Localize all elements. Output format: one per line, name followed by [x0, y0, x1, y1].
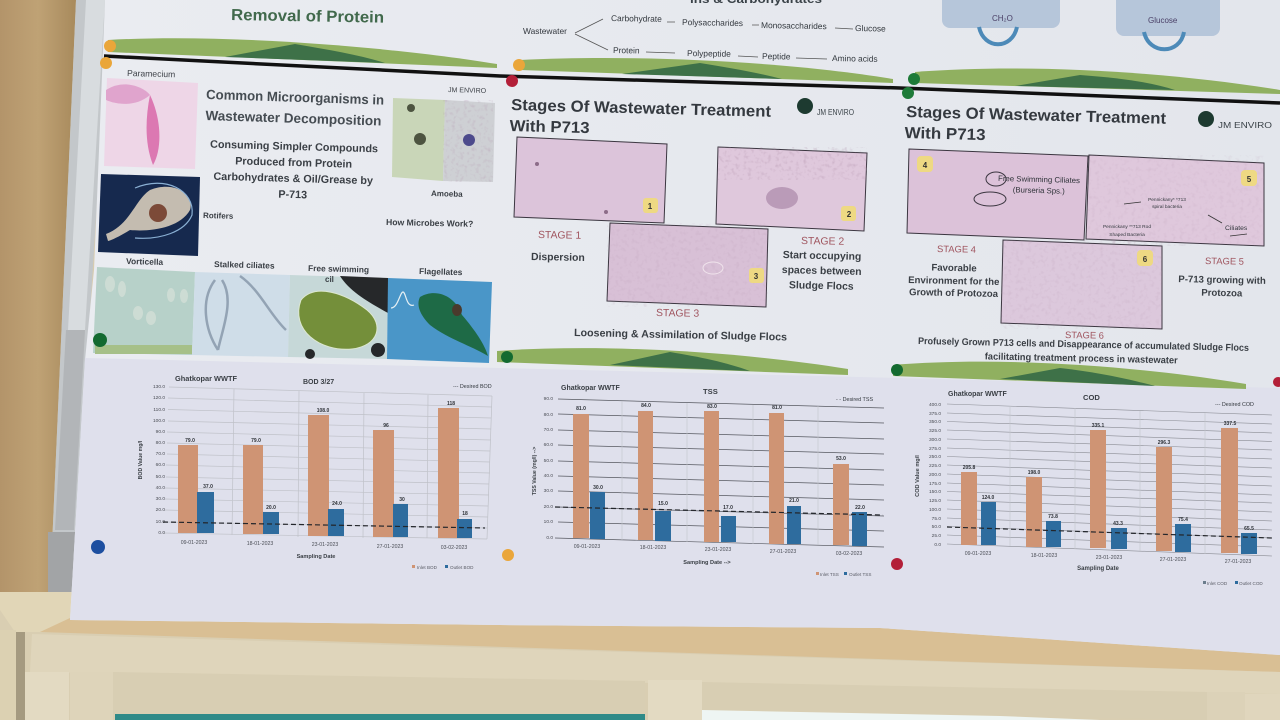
flow diagram: Monosaccharides — [761, 20, 827, 31]
y axis: 0.0 — [934, 542, 941, 548]
flow diagram: Peptide — [762, 51, 791, 62]
y axis: 225.0 — [929, 463, 941, 469]
logo: JM Enviro — [797, 98, 854, 117]
value labels: 81.0 — [576, 406, 586, 412]
box: glucose — [1116, 0, 1220, 49]
text: profusely grown: facilitating treatment process in wastewater — [985, 351, 1178, 366]
subheading: consuming simpler compounds: Consuming Simpler Compounds — [210, 139, 378, 155]
image: stage 5: Shaped Bacteria — [1109, 232, 1145, 238]
y axis: 30.0 — [156, 496, 165, 502]
value labels: 96 — [383, 423, 389, 429]
desired line — [163, 522, 485, 528]
value labels: 118 — [447, 401, 455, 407]
bars — [178, 408, 472, 538]
chart titles: Ghatkopar WWTF — [561, 385, 620, 392]
chart titles: COD — [1083, 393, 1100, 402]
value labels: 205.8 — [963, 465, 975, 471]
value labels: 21.0 — [789, 498, 799, 504]
heading: common microorganisms: Wastewater Decomposition — [205, 108, 382, 129]
value labels — [963, 421, 1254, 532]
poster: common microorganisms — [93, 68, 495, 363]
text: P-713 growing: P-713 growing with — [1178, 274, 1266, 287]
y axis: 0.0 — [546, 535, 553, 541]
x axis labels: 27-01-2023 — [1225, 559, 1251, 565]
image: stage 6 — [1001, 240, 1162, 329]
label: free swimming: Free swimming — [308, 263, 369, 275]
chart titles: --- Desired BOD — [453, 384, 492, 390]
value labels: 124.0 — [982, 495, 994, 501]
chart titles — [175, 374, 492, 390]
heading: stages of wastewater treatment: With P713 — [904, 125, 986, 144]
value labels: 20.0 — [266, 505, 276, 511]
y axis: BOD Value mg/l — [138, 440, 144, 479]
chart titles: --- Desired COD — [1215, 402, 1254, 408]
image: rotifers — [98, 174, 200, 256]
value labels: 108.0 — [317, 408, 329, 414]
y axis: 100.0 — [153, 418, 165, 424]
heading: stages of wastewater treatment: With P713 — [509, 118, 590, 137]
top centre poster fragment — [520, 0, 893, 83]
y axis: TSS Value (mg/l) --> — [532, 447, 538, 495]
y axis: 80.0 — [544, 412, 553, 418]
x axis labels: 18-01-2023 — [640, 545, 666, 551]
y axis: 60.0 — [156, 462, 165, 468]
logo: JM Enviro: JM ENVIRO — [817, 107, 854, 117]
image: stage 5: Pennickany* *713 — [1148, 197, 1186, 203]
poster: stages 1 to 3 — [497, 97, 867, 375]
flow diagram: Protein — [613, 45, 640, 55]
value labels: 81.0 — [772, 405, 782, 411]
label: vorticella: Vorticella — [126, 256, 164, 267]
value labels: 18 — [462, 511, 468, 517]
y axis: 40.0 — [156, 485, 165, 491]
y axis: 70.0 — [544, 427, 553, 433]
y axis: 60.0 — [544, 442, 553, 448]
image: stage 5: Pennickany **713 Rod — [1103, 224, 1151, 230]
value labels: 22.0 — [855, 505, 865, 511]
y axis: 20.0 — [544, 504, 553, 510]
wooden wall at left — [0, 0, 76, 592]
bars — [961, 428, 1257, 554]
subheading: consuming simpler compounds: P-713 — [278, 189, 307, 201]
desired line — [947, 527, 1272, 538]
y axis: 250.0 — [929, 454, 941, 460]
text: P-713 growing: Protozoa — [1201, 288, 1243, 299]
value labels: 84.0 — [641, 403, 651, 409]
x axis labels: 23-01-2023 — [312, 542, 338, 548]
image: stage 4: (Burseria Sps.) — [1013, 185, 1065, 196]
y axis: 80.0 — [156, 440, 165, 446]
flow diagram: Wastewater — [523, 26, 567, 36]
value labels: 37.0 — [203, 484, 213, 490]
y axis: 25.0 — [932, 533, 941, 539]
y axis: 0.0 — [158, 530, 165, 536]
text: dispersion: Dispersion — [531, 252, 585, 264]
x axis labels — [574, 544, 862, 566]
subheading: consuming simpler compounds: Produced from Protein — [235, 155, 352, 171]
x axis labels: 03-02-2023 — [441, 545, 467, 551]
caption: how microbes work: How Microbes Work? — [386, 217, 473, 229]
y axis — [915, 402, 941, 548]
text: loosening: Loosening & Assimilation of Sludge Flocs — [574, 327, 787, 343]
flow diagram: Carbohydrate — [611, 13, 662, 24]
y axis — [532, 396, 553, 541]
value labels: 30.0 — [593, 485, 603, 491]
y axis: 50.0 — [544, 458, 553, 464]
value labels: 53.0 — [836, 456, 846, 462]
green swoosh — [108, 38, 497, 68]
gridlines — [555, 399, 884, 547]
value labels: 335.1 — [1092, 423, 1104, 429]
y axis: 10.0 — [156, 519, 165, 525]
image: stage 6: 6 — [1143, 255, 1148, 264]
text: start occupying: Sludge Flocs — [789, 280, 854, 293]
y axis: 30.0 — [544, 488, 553, 494]
chart: TSS — [532, 385, 884, 577]
chart titles — [561, 385, 873, 403]
y axis: 300.0 — [929, 437, 941, 443]
y axis: 50.0 — [156, 474, 165, 480]
x axis labels: 27-01-2023 — [1160, 557, 1186, 563]
x axis labels: 27-01-2023 — [377, 544, 403, 550]
black divider line — [104, 56, 1280, 103]
x axis labels — [965, 551, 1251, 572]
value labels: 43.3 — [1113, 521, 1123, 527]
chart: BOD — [138, 374, 492, 570]
image: stage 5: Ciliates — [1225, 225, 1248, 232]
image: stage 2 — [716, 147, 867, 231]
y axis: 120.0 — [153, 395, 165, 401]
green swoosh — [915, 68, 1280, 94]
image: stage 1: 1 — [648, 202, 653, 211]
x axis labels: Sampling Date --> — [683, 560, 731, 566]
flow diagram: Polypeptide — [687, 48, 731, 59]
x axis labels: 18-01-2023 — [247, 541, 273, 547]
y axis: 75.0 — [932, 516, 941, 522]
image: stage 3: 3 — [754, 272, 759, 281]
y axis: 125.0 — [929, 498, 941, 504]
x axis labels: 23-01-2023 — [1096, 555, 1122, 561]
legend: Outlet TSS — [849, 572, 871, 577]
x axis labels: 23-01-2023 — [705, 547, 731, 553]
image: stage 4: Free Swimming Ciliates — [998, 174, 1080, 185]
heading: common microorganisms: Common Microorganisms in — [206, 87, 384, 108]
green swoosh — [893, 362, 1246, 389]
y axis: 100.0 — [929, 507, 941, 513]
heading: stages of wastewater treatment: Stages Of Wastewater Treatment — [511, 97, 772, 121]
value labels: 79.0 — [251, 438, 261, 444]
lower sheet shading — [70, 358, 1280, 655]
label: rotifers: Rotifers — [203, 211, 234, 221]
heading: stages of wastewater treatment: Stages Of Wastewater Treatment — [906, 104, 1167, 128]
image: stalked ciliates — [192, 272, 290, 357]
y axis: 150.0 — [929, 489, 941, 495]
y axis: 175.0 — [929, 481, 941, 487]
y axis: 130.0 — [153, 384, 165, 390]
window frame trim — [0, 592, 1280, 720]
x axis labels: 09-01-2023 — [181, 540, 207, 546]
image: free swimming ciliate — [288, 275, 388, 359]
label: stage 2: STAGE 2 — [801, 236, 844, 248]
x axis labels: 03-02-2023 — [836, 551, 862, 557]
label: flagellates: Flagellates — [419, 266, 463, 277]
legend — [816, 572, 871, 577]
image: free swimming ciliate: cil — [325, 275, 334, 284]
image: stage 2: 2 — [847, 210, 852, 219]
legend — [1203, 581, 1263, 586]
text: start occupying: spaces between — [782, 265, 862, 278]
image: stage 4: 4 — [923, 161, 928, 170]
x axis labels: 09-01-2023 — [965, 551, 991, 557]
y axis: 70.0 — [156, 451, 165, 457]
pins — [91, 40, 1280, 570]
text: favorable environment: Environment for the — [908, 275, 999, 288]
green swoosh — [520, 58, 893, 83]
subheading: consuming simpler compounds: Carbohydrates & Oil/Grease by — [213, 171, 373, 187]
chart titles: BOD 3/27 — [303, 379, 334, 386]
legend: Outlet COD — [1239, 581, 1263, 586]
label: stalked ciliates: Stalked ciliates — [214, 259, 275, 271]
image: flagellates — [387, 278, 492, 363]
y axis: 20.0 — [156, 507, 165, 513]
y axis: 50.0 — [932, 524, 941, 530]
y axis: 375.0 — [929, 411, 941, 417]
box: CH2O — [942, 0, 1060, 44]
x axis labels — [181, 540, 467, 560]
box: CH2O: CH₂O — [992, 14, 1013, 23]
legend: Inlet TSS — [820, 572, 839, 577]
value labels: 15.0 — [658, 501, 668, 507]
image: vorticella — [93, 267, 195, 355]
x axis labels: Sampling Date — [297, 554, 335, 560]
value labels: 24.0 — [332, 501, 342, 507]
value labels: 79.0 — [185, 438, 195, 444]
y axis: 10.0 — [544, 519, 553, 525]
value labels: 198.0 — [1028, 470, 1040, 476]
image: paramecium — [104, 78, 198, 169]
x axis labels: 18-01-2023 — [1031, 553, 1057, 559]
text: favorable environment: Favorable — [931, 263, 977, 274]
window glass — [115, 714, 645, 720]
value labels: 73.8 — [1048, 514, 1058, 520]
image: stage 5: spiral bacteria — [1152, 204, 1182, 210]
y axis: 275.0 — [929, 446, 941, 452]
y axis: 400.0 — [929, 402, 941, 408]
y axis: 90.0 — [544, 396, 553, 402]
logo: JM Enviro small: JM ENVIRO — [448, 87, 487, 95]
y axis: 325.0 — [929, 428, 941, 434]
image: stage 5: 5 — [1247, 175, 1252, 184]
y axis — [138, 384, 165, 536]
value labels — [185, 401, 468, 517]
flow diagram: Amino acids — [832, 53, 878, 64]
text: favorable environment: Growth of Protozoa — [909, 287, 999, 300]
box: glucose: Glucose — [1148, 16, 1178, 25]
text: profusely grown: Profusely Grown P713 cells and Disappearance of accumulated Sludge Flocs — [918, 336, 1249, 354]
board tray bracket — [48, 532, 76, 593]
value labels: 65.5 — [1244, 526, 1254, 532]
image: amoeba — [392, 98, 495, 182]
x axis labels: Sampling Date — [1077, 566, 1119, 572]
value labels: 83.0 — [707, 404, 717, 410]
logo: JM Enviro: JM ENVIRO — [1218, 120, 1273, 130]
label: stage 4: STAGE 4 — [937, 243, 976, 255]
value labels: 17.0 — [723, 505, 733, 511]
poster: stages 4 to 6 — [893, 104, 1273, 389]
label: amoeba: Amoeba — [431, 189, 463, 199]
legend: Inlet COD — [1207, 581, 1228, 586]
chart titles: Ghatkopar WWTF — [175, 374, 237, 383]
logo: JM Enviro — [1198, 111, 1273, 130]
value labels: 30 — [399, 497, 405, 503]
y axis: 110.0 — [153, 407, 165, 413]
y axis: COD Value mg/l — [915, 455, 921, 497]
image: stage 5 — [1086, 155, 1264, 246]
y axis: 40.0 — [544, 473, 553, 479]
bars — [573, 411, 867, 546]
y axis: 90.0 — [156, 429, 165, 435]
label: stage 6: STAGE 6 — [1065, 329, 1104, 341]
gridlines — [163, 387, 492, 539]
gridlines — [947, 404, 1272, 556]
image: stage 1 — [514, 137, 667, 223]
chart titles — [948, 391, 1254, 408]
legend — [412, 565, 474, 570]
y axis: 200.0 — [929, 472, 941, 478]
y axis: 350.0 — [929, 419, 941, 425]
legend: Outlet BOD — [450, 565, 474, 570]
label: paramecium: Paramecium — [127, 68, 175, 79]
whiteboard frame — [50, 0, 110, 625]
image: stage 3 — [607, 223, 768, 307]
label: stage 3: STAGE 3 — [656, 308, 699, 320]
flow diagram: Glucose — [855, 23, 886, 34]
chart: COD — [915, 391, 1272, 586]
chart titles: - - Desired TSS — [836, 397, 873, 403]
x axis labels: 27-01-2023 — [770, 549, 796, 555]
top left poster fragment — [108, 7, 497, 68]
desired line — [555, 507, 883, 515]
value labels: 337.5 — [1224, 421, 1236, 427]
top right poster fragment — [915, 0, 1280, 94]
image: stage 4 — [907, 149, 1088, 240]
value labels: 75.4 — [1178, 517, 1188, 523]
flow diagram: Polysaccharides — [682, 17, 743, 28]
legend: Inlet BOD — [417, 565, 438, 570]
label: stage 1: STAGE 1 — [538, 230, 581, 242]
label: stage 5: STAGE 5 — [1205, 255, 1244, 267]
heading: removal of protein: Removal of Protein — [231, 7, 384, 27]
value labels: 296.3 — [1158, 440, 1170, 446]
flow diagram — [523, 13, 886, 64]
chart titles: TSS — [703, 387, 718, 396]
value labels — [576, 403, 865, 511]
text: start occupying: Start occupying — [783, 250, 861, 263]
x axis labels: 09-01-2023 — [574, 544, 600, 550]
green swoosh — [497, 348, 848, 375]
chart titles: Ghatkopar WWTF — [948, 391, 1007, 398]
